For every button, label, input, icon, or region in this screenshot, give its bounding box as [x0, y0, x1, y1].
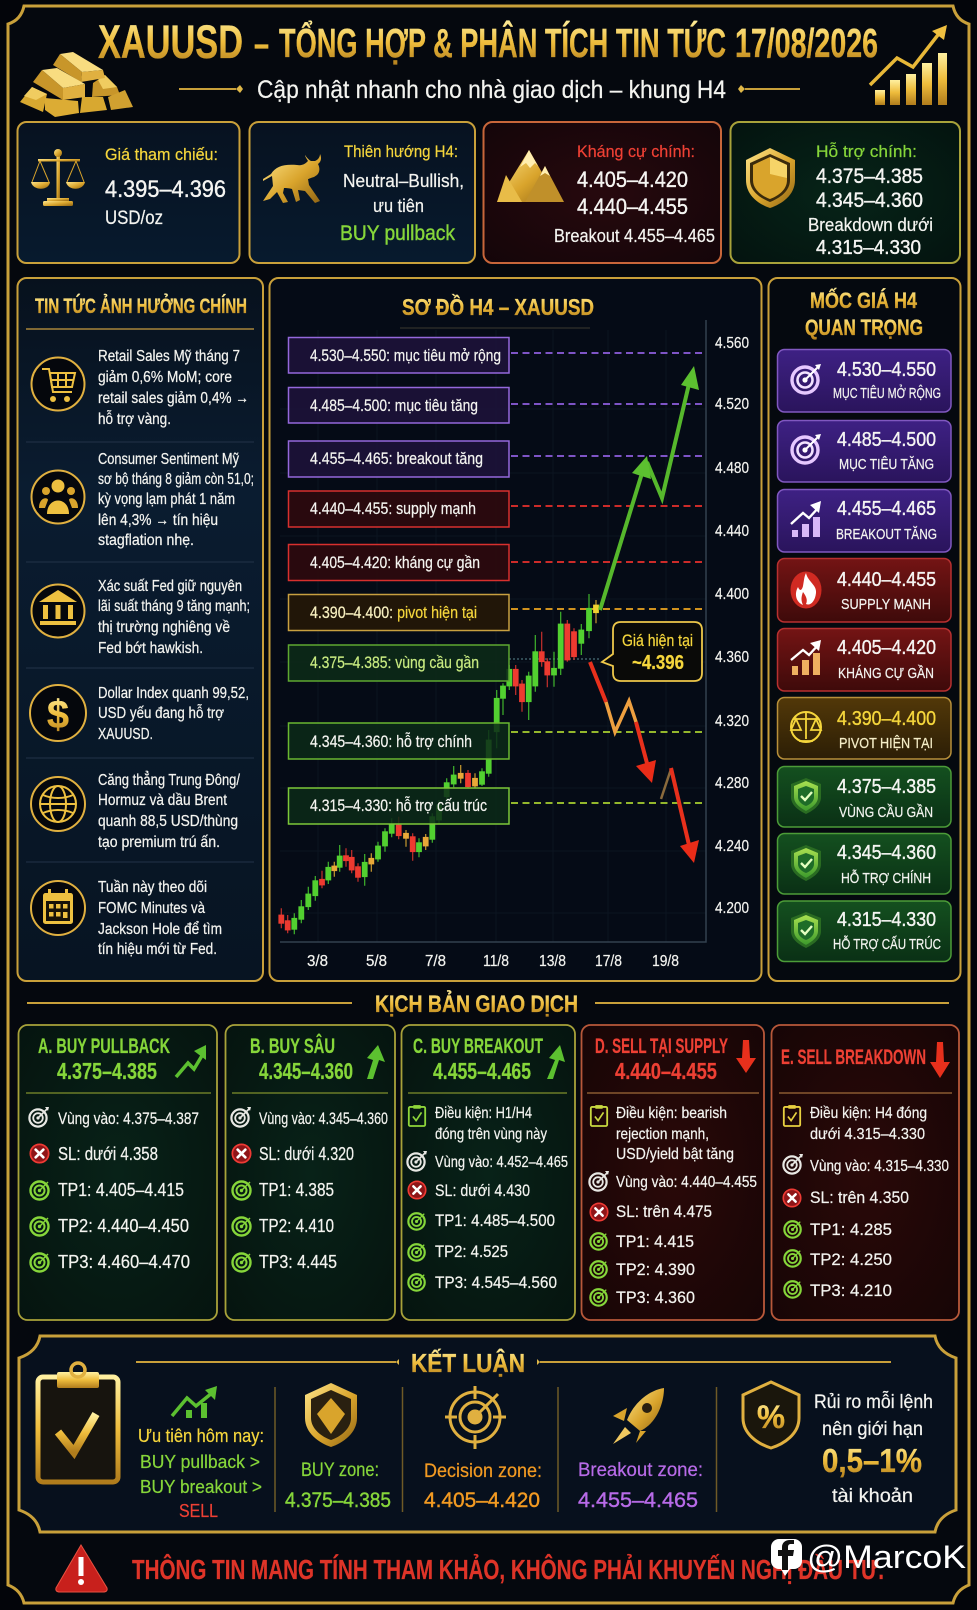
level row: 4.530–4.550: 4.530–4.550 — [837, 359, 936, 381]
scenario B: buy deep: SL: dưới 4.320 — [259, 1144, 354, 1164]
level label: 4.315–4.330: 4.315–4.330: hỗ trợ cấu trúc — [310, 796, 487, 815]
news: Middle East tension: quanh 88,5 USD/thùng — [98, 813, 238, 830]
card: H4 bias: Thiên hướng H4: — [344, 142, 458, 161]
news: dollar index: Dollar Index quanh 99,52, — [98, 685, 249, 702]
scenario B: buy deep: TP1: 4.385 — [259, 1180, 334, 1200]
scenario E: sell breakdown: TP1: 4.285 — [810, 1220, 892, 1239]
level label: 4.405–4.420: 4.405–4.420: kháng cự gần — [310, 554, 480, 572]
news: consumer sentiment: Consumer Sentiment Mỹ — [98, 451, 239, 468]
scenario B: buy deep: 4.345–4.360 — [259, 1058, 353, 1084]
icon: warning triangle — [56, 1545, 107, 1592]
priority block: BUY pullback > — [140, 1451, 260, 1472]
level row: 4.440–4.455: 4.440–4.455 — [837, 569, 936, 591]
scenario D: sell at supply: SL: trên 4.475 — [616, 1202, 712, 1221]
scenario C: buy breakout: TP2: 4.525 — [435, 1242, 508, 1261]
level label: 4.315–4.330 — [288, 788, 509, 824]
news: consumer sentiment: kỳ vọng lạm phát 1 năm — [98, 491, 235, 508]
card: main support: 4.315–4.330 — [816, 237, 921, 259]
risk block: nên giới hạn — [822, 1419, 923, 1440]
scenario C: buy breakout: Điều kiện: H1/H4 — [435, 1105, 532, 1122]
panel: H4 chart — [270, 278, 762, 981]
level row: 4.455–4.465: BREAKOUT TĂNG — [836, 526, 937, 543]
news: dollar index: USD yếu đang hỗ trợ — [98, 705, 224, 722]
news: retail sales: Retail Sales Mỹ tháng 7 — [98, 348, 240, 365]
buy zone: 4.375–4.385 — [285, 1489, 391, 1512]
date axis labels: 3/8 — [307, 953, 328, 970]
news: Middle East tension — [31, 771, 241, 851]
priority block: BUY breakout > — [140, 1476, 262, 1497]
news: consumer sentiment: lên 4,3% → tín hiệu — [98, 512, 218, 529]
card: main resistance: 4.405–4.420 — [577, 167, 688, 192]
price axis labels — [715, 335, 749, 917]
icon: percent shield — [743, 1382, 799, 1448]
level label: 4.345–4.360: 4.345–4.360: hỗ trợ chính — [310, 732, 472, 751]
scenario C: buy breakout: 4.455–4.465 — [433, 1058, 531, 1084]
buy zone — [285, 1383, 391, 1512]
news: Middle East tension: Hormuz và dầu Brent — [98, 792, 228, 809]
scenario C: buy breakout: Vùng vào: 4.452–4.465 — [435, 1154, 568, 1171]
news: Fed probability: Fed bớt hawkish. — [98, 640, 203, 657]
title: XAUUSD — [98, 15, 243, 68]
level row: 4.485–4.500: MỤC TIÊU TĂNG — [839, 456, 934, 473]
level row: 4.405–4.420 — [778, 628, 951, 691]
levels heading — [805, 287, 923, 340]
price axis labels: 4.560 — [715, 335, 749, 352]
scenario A: buy pullback: Vùng vào: 4.375–4.387 — [58, 1109, 199, 1128]
price axis labels: 4.440 — [715, 523, 749, 540]
level row: 4.375–4.385: VÙNG CẦU GẦN — [839, 804, 933, 821]
buy zone: BUY zone: — [301, 1460, 379, 1481]
news: Middle East tension: Căng thẳng Trung Đông/ — [98, 771, 241, 789]
risk block: Rủi ro mỗi lệnh — [814, 1391, 933, 1413]
scenario E: sell breakdown: SL: trên 4.350 — [810, 1188, 909, 1207]
level row: 4.530–4.550: MỤC TIÊU MỞ RỘNG — [833, 384, 941, 402]
news: Fed probability: thị trường nghiêng về — [98, 619, 230, 636]
icon: down arrow — [930, 1042, 950, 1078]
priority block: SELL — [179, 1500, 218, 1521]
level row: 4.375–4.385: 4.375–4.385 — [837, 776, 936, 798]
decision zone — [424, 1386, 542, 1512]
scenario D: sell at supply: TP3: 4.360 — [616, 1288, 695, 1307]
card: main support: 4.375–4.385 — [816, 165, 923, 188]
callout: current price: ~4.396 — [632, 652, 684, 674]
icon: mountains — [497, 150, 564, 202]
level row: 4.405–4.420: 4.405–4.420 — [837, 637, 936, 659]
news: Fed probability: lãi suất tháng 9 tăng mạnh; — [98, 598, 250, 615]
icon: shield — [746, 148, 795, 208]
title — [98, 15, 878, 68]
price axis labels: 4.240 — [715, 838, 749, 855]
priority block — [138, 1386, 264, 1521]
level row: 4.440–4.455 — [778, 558, 951, 622]
date axis labels: 13/8 — [539, 953, 566, 970]
scenario A: buy pullback — [18, 1025, 217, 1320]
price axis labels: 4.320 — [715, 713, 749, 730]
level row: 4.440–4.455: SUPPLY MẠNH — [841, 597, 931, 613]
date axis labels: 19/8 — [652, 953, 679, 970]
scenario E: sell breakdown: TP3: 4.210 — [810, 1281, 892, 1300]
level label: 4.455–4.465 — [288, 441, 509, 477]
news: consumer sentiment — [32, 451, 254, 549]
icon: clipboard — [38, 1363, 118, 1482]
card: main resistance: Kháng cự chính: — [577, 142, 695, 161]
conclusion heading — [136, 1348, 891, 1378]
risk block: tài khoản — [832, 1486, 913, 1507]
news: dollar index: XAUUSD. — [98, 726, 153, 743]
scenario D: sell at supply: D. SELL TẠI SUPPLY — [595, 1035, 728, 1058]
level label: 4.530–4.550 — [288, 338, 509, 373]
card: main resistance — [484, 122, 721, 263]
level row: 4.485–4.500 — [778, 420, 951, 482]
card: main support: 4.345–4.360 — [816, 189, 923, 212]
levels heading: QUAN TRỌNG — [805, 315, 923, 340]
news: FOMC calendar: FOMC Minutes và — [98, 900, 205, 917]
levels heading: MỐC GIÁ H4 — [810, 287, 918, 313]
card: H4 bias: Neutral–Bullish, — [343, 171, 464, 191]
news heading: TIN TỨC ẢNH HƯỞNG CHÍNH — [35, 294, 247, 318]
icon: up arrow — [547, 1045, 565, 1079]
level row: 4.345–4.360: HỖ TRỢ CHÍNH — [841, 869, 931, 887]
scenario D: sell at supply: TP2: 4.390 — [616, 1260, 695, 1279]
scenario D: sell at supply: rejection mạnh, — [616, 1126, 709, 1143]
level row: 4.345–4.360: 4.345–4.360 — [837, 842, 936, 864]
icon: down arrow — [736, 1040, 756, 1073]
panel: key H4 levels — [768, 278, 960, 981]
panel: conclusion — [19, 1336, 956, 1532]
icon: up arrow — [367, 1045, 385, 1079]
level label: 4.375–4.385 — [288, 645, 509, 681]
date axis labels: 7/8 — [425, 953, 446, 970]
decision zone: 4.405–4.420 — [424, 1489, 540, 1512]
level row: 4.390–4.400 — [778, 698, 951, 759]
arrow: bearish scenario — [590, 662, 699, 863]
card: main resistance: Breakout 4.455–4.465 — [554, 226, 715, 246]
scenario A: buy pullback: SL: dưới 4.358 — [58, 1144, 158, 1164]
icon: facebook badge — [771, 1539, 802, 1576]
level label: 4.440–4.455: 4.440–4.455: supply mạnh — [310, 500, 476, 518]
scenario A: buy pullback: 4.375–4.385 — [57, 1058, 157, 1084]
scenario C: buy breakout: C. BUY BREAKOUT — [413, 1035, 543, 1058]
card: reference price: 4.395–4.396 — [105, 176, 226, 203]
chart axes — [280, 320, 706, 942]
priority block: Ưu tiên hôm nay: — [138, 1426, 264, 1446]
news: retail sales: giảm 0,6% MoM; core — [98, 369, 232, 386]
scenario E: sell breakdown: TP2: 4.250 — [810, 1250, 892, 1269]
card: H4 bias: ưu tiên — [373, 196, 424, 216]
level row: 4.315–4.330: 4.315–4.330 — [837, 909, 936, 931]
title: TỔNG HỢP & PHÂN TÍCH TIN TỨC — [279, 19, 726, 66]
news: Middle East tension: tạo premium trú ấn. — [98, 834, 220, 851]
scenario E: sell breakdown — [772, 1025, 959, 1320]
watermark: @MarcoK — [807, 1539, 966, 1575]
icon: target — [445, 1386, 506, 1449]
date axis labels: 11/8 — [483, 953, 509, 970]
price axis labels: 4.520 — [715, 396, 749, 413]
icon: bull — [263, 154, 321, 203]
price axis labels: 4.400 — [715, 586, 749, 603]
title: – — [254, 22, 269, 66]
icon: rising chart — [870, 25, 947, 105]
scenario C: buy breakout — [402, 1025, 575, 1320]
news: retail sales: retail sales giảm 0,4% → — [98, 390, 249, 407]
news: FOMC calendar: Jackson Hole để tìm — [98, 921, 222, 938]
subtitle: Cập nhật nhanh cho nhà giao dịch – khung H4 — [257, 76, 726, 104]
news: FOMC calendar: tín hiệu mới từ Fed. — [98, 941, 217, 958]
icon: up trend arrow — [176, 1045, 206, 1077]
scenario B: buy deep: TP3: 4.445 — [259, 1252, 337, 1272]
level row: 4.375–4.385 — [778, 766, 951, 827]
news: FOMC calendar: Tuần này theo dõi — [98, 879, 207, 896]
level label: 4.485–4.500 — [288, 388, 509, 423]
scenario E: sell breakdown: Điều kiện: H4 đóng — [810, 1105, 927, 1122]
scenario D: sell at supply: Điều kiện: bearish — [616, 1105, 727, 1122]
scenario D: sell at supply: TP1: 4.415 — [616, 1232, 694, 1251]
level row: 4.455–4.465 — [778, 490, 951, 552]
level label: 4.390–4.400 — [288, 594, 509, 630]
breakout zone — [578, 1388, 703, 1512]
icon: gold bars — [20, 52, 133, 117]
card: main support: Breakdown dưới — [808, 215, 933, 235]
scenario D: sell at supply: 4.440–4.455 — [615, 1058, 717, 1084]
level row: 4.315–4.330: HỖ TRỢ CẤU TRÚC — [833, 935, 941, 953]
price axis labels: 4.360 — [715, 649, 749, 666]
icon: percent shield: % — [757, 1399, 785, 1435]
news: dollar index: $ — [47, 693, 69, 737]
breakout zone: Breakout zone: — [578, 1460, 703, 1481]
risk block: 0,5–1% — [822, 1442, 922, 1479]
price axis labels: 4.480 — [715, 460, 749, 477]
scenario A: buy pullback: TP2: 4.440–4.450 — [58, 1216, 189, 1236]
icon: rising trend — [172, 1386, 217, 1418]
date axis labels: 17/8 — [595, 953, 622, 970]
scenario C: buy breakout: đóng trên vùng này — [435, 1126, 547, 1143]
news: dollar index — [30, 685, 249, 743]
price axis labels: 4.280 — [715, 775, 749, 792]
level row: 4.485–4.500: 4.485–4.500 — [837, 429, 936, 451]
date axis labels: 5/8 — [366, 953, 387, 970]
header — [20, 15, 947, 117]
card: H4 bias — [250, 122, 475, 263]
scenario D: sell at supply — [582, 1025, 764, 1320]
decision zone: Decision zone: — [424, 1461, 542, 1482]
price axis labels: 4.200 — [715, 900, 749, 917]
card: H4 bias: BUY pullback — [340, 222, 455, 245]
scenario A: buy pullback: TP1: 4.405–4.415 — [58, 1180, 184, 1200]
level dashed lines — [509, 353, 703, 803]
icon: gold shield — [305, 1383, 357, 1447]
panel: main news — [18, 278, 263, 981]
risk block — [743, 1382, 933, 1507]
level label: 4.390–4.400: 4.390–4.400: pivot hiện tại — [310, 604, 477, 622]
level label: 4.375–4.385: 4.375–4.385: vùng cầu gần — [310, 654, 479, 672]
scenario E: sell breakdown: dưới 4.315–4.330 — [810, 1126, 925, 1143]
title: 17/08/2026 — [735, 20, 878, 66]
scenario D: sell at supply: USD/yield bật tăng — [616, 1146, 734, 1163]
level row: 4.390–4.400: PIVOT HIỆN TẠI — [839, 735, 933, 752]
scenario B: buy deep — [226, 1025, 395, 1320]
scenario B: buy deep: TP2: 4.410 — [259, 1216, 334, 1236]
card: main resistance: 4.440–4.455 — [577, 194, 688, 219]
disclaimer — [56, 1545, 884, 1592]
level row: 4.530–4.550 — [778, 350, 951, 412]
breakout zone: 4.455–4.465 — [578, 1489, 698, 1512]
level label: 4.440–4.455 — [288, 491, 509, 527]
level row: 4.405–4.420: KHÁNG CỰ GẦN — [838, 665, 934, 682]
level row: 4.315–4.330 — [778, 901, 951, 962]
news: Fed probability: Xác suất Fed giữ nguyên — [98, 578, 242, 595]
scenario D: sell at supply: Vùng vào: 4.440–4.455 — [616, 1174, 757, 1191]
card: reference price: USD/oz — [105, 208, 163, 229]
level label: 4.455–4.465: 4.455–4.465: breakout tăng — [310, 450, 483, 468]
scenario B: buy deep: Vùng vào: 4.345–4.360 — [259, 1110, 388, 1128]
news: consumer sentiment: stagflation nhẹ. — [98, 532, 194, 549]
chart heading: SƠ ĐỒ H4 – XAUUSD — [402, 293, 594, 320]
scenario A: buy pullback: A. BUY PULLBACK — [38, 1035, 170, 1058]
candlesticks — [279, 594, 598, 934]
card: main support: Hỗ trợ chính: — [816, 142, 917, 161]
level row: 4.390–4.400: 4.390–4.400 — [837, 708, 936, 730]
conclusion heading: KẾT LUẬN — [411, 1348, 525, 1378]
card: main support — [730, 122, 960, 263]
scenario C: buy breakout: TP3: 4.545–4.560 — [435, 1273, 557, 1292]
news: consumer sentiment: sơ bộ tháng 8 giảm còn 51,0; — [98, 471, 254, 488]
arrow: bullish scenario — [600, 366, 699, 610]
level label: 4.345–4.360 — [288, 723, 509, 759]
scenario A: buy pullback: TP3: 4.460–4.470 — [58, 1252, 190, 1272]
callout: current price — [602, 622, 702, 681]
scenario B: buy deep: B. BUY SÂU — [250, 1034, 335, 1058]
news: Fed probability — [32, 578, 250, 657]
card: reference price: Giá tham chiếu: — [105, 145, 218, 164]
icon: scales — [31, 149, 85, 206]
icon: rocket — [613, 1388, 664, 1444]
scenario C: buy breakout: TP1: 4.485–4.500 — [435, 1211, 555, 1230]
level row: 4.345–4.360 — [778, 834, 951, 894]
news: retail sales — [32, 348, 249, 428]
card: reference price — [18, 122, 240, 263]
scenario C: buy breakout: SL: dưới 4.430 — [435, 1181, 530, 1200]
scenario E: sell breakdown: Vùng vào: 4.315–4.330 — [810, 1158, 949, 1175]
level label: 4.530–4.550: 4.530–4.550: mục tiêu mở rộng — [310, 347, 501, 365]
date axis labels — [307, 953, 679, 970]
news: retail sales: hỗ trợ vàng. — [98, 411, 171, 428]
callout: current price: Giá hiện tại — [622, 631, 693, 650]
heading: trading scenarios: KỊCH BẢN GIAO DỊCH — [375, 989, 578, 1018]
level label: 4.405–4.420 — [288, 544, 509, 580]
news: FOMC calendar — [31, 879, 222, 958]
level row: 4.455–4.465: 4.455–4.465 — [837, 498, 936, 520]
level label: 4.485–4.500: 4.485–4.500: mục tiêu tăng — [310, 397, 478, 415]
